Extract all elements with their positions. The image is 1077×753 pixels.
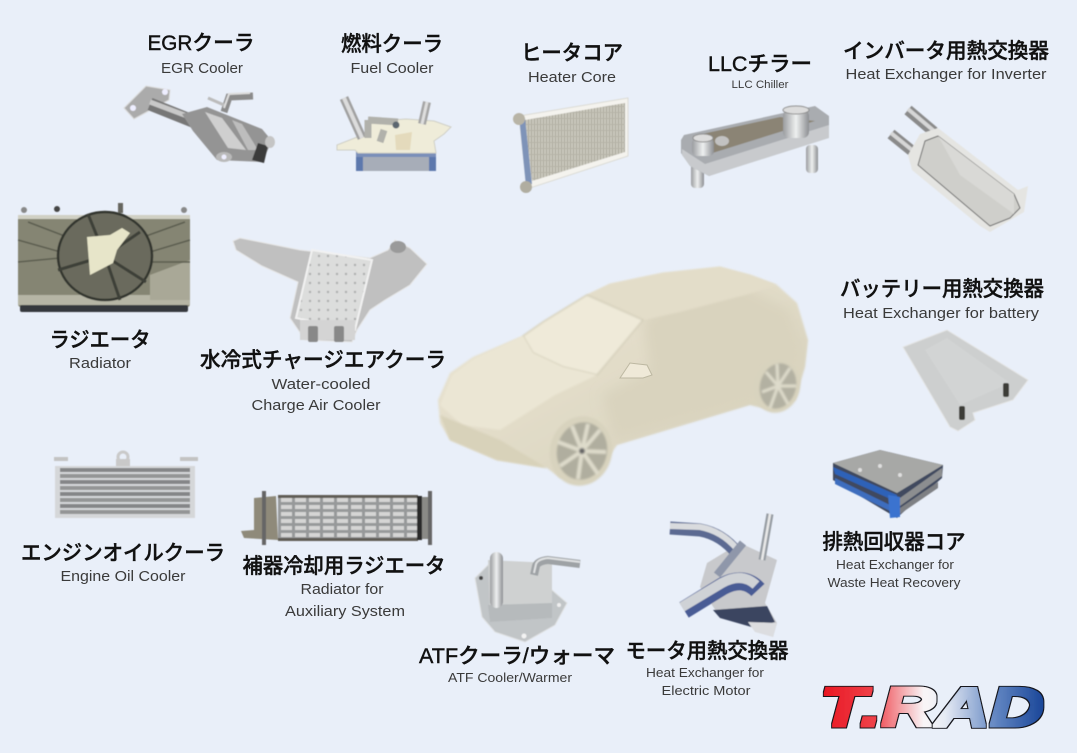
subtitle: Electric Motor: Electric Motor [662, 683, 751, 698]
subtitle: Heater Core: Heater Core [528, 70, 616, 86]
product: engine oil cooler [21, 452, 225, 585]
title: radiator: ラジエータ [50, 329, 150, 352]
car roof [587, 267, 777, 320]
title: heater core: ヒータコア [521, 42, 623, 65]
icon: engine oil cooler part [54, 452, 198, 518]
subtitle: LLC Chiller: LLC Chiller [732, 79, 789, 91]
icon: heater core part [513, 98, 628, 193]
product: water-cooled charge air cooler [200, 238, 446, 414]
icon: auxiliary radiator part [241, 491, 432, 545]
product: ATF cooler / warmer [419, 552, 615, 685]
product: radiator [18, 203, 190, 372]
product: EGR cooler [124, 32, 275, 163]
car windshield [523, 295, 643, 375]
title: motor heat exchanger: モータ用熱交換器 [626, 640, 788, 663]
product: radiator for auxiliary system [241, 491, 446, 620]
subtitle: Radiator for: Radiator for [300, 582, 384, 598]
subtitle: Waste Heat Recovery: Waste Heat Recovery [828, 575, 961, 590]
subtitle: Engine Oil Cooler: Engine Oil Cooler [60, 569, 186, 585]
product: fuel cooler [337, 33, 451, 171]
product: heat exchanger for inverter [843, 40, 1049, 232]
subtitle: Fuel Cooler: Fuel Cooler [350, 61, 434, 77]
icon: fuel cooler part [337, 98, 451, 171]
subtitle: Heat Exchanger for battery: Heat Exchanger for battery [843, 306, 1040, 322]
subtitle: Heat Exchanger for: Heat Exchanger for [836, 557, 955, 572]
title: ATF cooler / warmer: ATFクーラ/ウォーマ [419, 645, 615, 668]
title: engine oil cooler: エンジンオイルクーラ [21, 542, 225, 565]
icon: radiator and fan part [18, 203, 190, 312]
title: waste heat recovery core: 排熱回収器コア [822, 531, 966, 554]
title: EGR cooler: EGRクーラ [148, 32, 254, 55]
icon: charge air cooler part [233, 238, 427, 342]
subtitle: EGR Cooler: EGR Cooler [161, 61, 243, 77]
logo: T.RAD: T.RAD [820, 676, 1044, 738]
icon: motor heat exchanger part [670, 514, 777, 637]
title: auxiliary radiator: 補器冷却用ラジエータ [242, 555, 446, 578]
product: waste heat recovery core [822, 450, 966, 590]
car front bumper [440, 415, 547, 468]
subtitle: Heat Exchanger for: Heat Exchanger for [646, 665, 765, 680]
title: battery heat exchanger: バッテリー用熱交換器 [840, 278, 1044, 301]
title: fuel cooler: 燃料クーラ [341, 33, 443, 56]
icon: inverter heat exchanger part [891, 109, 1028, 232]
icon: EGR cooler part [124, 86, 275, 163]
subtitle: Radiator: Radiator [69, 356, 131, 372]
car rear wheel [748, 354, 806, 418]
car mirror [620, 363, 652, 378]
car front wheel [542, 409, 620, 493]
title: water-cooled charge air cooler: 水冷式チャージエアクーラ [200, 349, 446, 372]
title: inverter heat exchanger: インバータ用熱交換器 [843, 40, 1049, 63]
car side shading [612, 296, 771, 400]
illustration: central car [438, 267, 808, 493]
product: heat exchanger for electric motor [626, 514, 788, 698]
product: LLC chiller [681, 53, 829, 188]
icon: ATF cooler part [475, 552, 580, 642]
subtitle: Auxiliary System: Auxiliary System [285, 604, 405, 620]
subtitle second line: Charge Air Cooler [252, 398, 381, 414]
subtitle: ATF Cooler/Warmer: ATF Cooler/Warmer [448, 670, 573, 685]
subtitle: Water-cooled Charge Air Cooler: Water-cooled [272, 377, 370, 393]
subtitle: Heat Exchanger for Inverter: Heat Exchanger for Inverter [846, 67, 1047, 83]
car body [438, 267, 808, 478]
product: heater core [513, 42, 628, 193]
car hood [440, 336, 597, 430]
product: heat exchanger for battery [840, 278, 1044, 431]
icon: battery heat exchanger part [903, 330, 1028, 431]
icon: LLC chiller part [681, 106, 829, 188]
title: LLC chiller: LLCチラー [708, 53, 812, 76]
icon: waste heat recovery core part [833, 450, 943, 518]
